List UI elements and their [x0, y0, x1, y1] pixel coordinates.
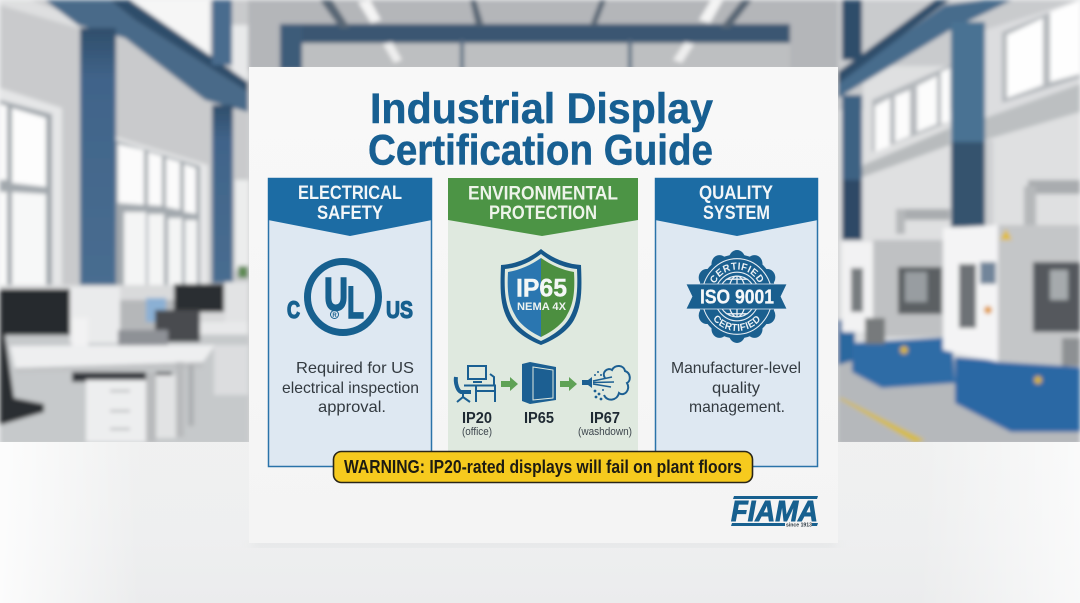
icon: office desk	[456, 366, 496, 402]
header: quality system: QUALITY	[699, 182, 773, 204]
text: quality description: Manufacturer-level	[671, 360, 801, 377]
icon: IP65 display	[522, 362, 556, 404]
callout: warning: WARNING: IP20-rated displays will fail on plant floors	[344, 457, 742, 477]
header: quality system: SYSTEM	[703, 202, 770, 224]
icon: cULus mark: U	[324, 268, 348, 320]
header: electrical safety	[268, 178, 432, 236]
icon: IP65 NEMA 4X shield: NEMA 4X	[517, 301, 567, 313]
right factory floor and machines	[838, 225, 1080, 445]
labels: IP ratings: (office)	[462, 426, 492, 438]
panel: quality system	[654, 178, 818, 468]
labels: IP ratings	[462, 410, 632, 438]
header: electrical safety: SAFETY	[317, 202, 383, 224]
icon: cULus mark: L	[347, 277, 364, 328]
arrow: office to IP65	[501, 377, 518, 391]
right factory wall	[838, 0, 1080, 445]
text: electrical description: Required for US	[296, 360, 414, 377]
ceiling	[240, 0, 850, 70]
header: environmental protection: PROTECTION	[489, 202, 597, 224]
text: quality description	[671, 360, 801, 416]
text: quality description: quality	[712, 380, 760, 397]
text: electrical description: approval.	[318, 399, 386, 416]
icon: ISO 9001 seal	[686, 250, 786, 343]
arrow: IP65 to washdown	[560, 377, 577, 391]
header: environmental protection	[448, 178, 638, 236]
icon: washdown spray	[582, 366, 630, 400]
labels: IP ratings: IP65	[524, 410, 554, 427]
labels: IP ratings: IP67	[590, 410, 620, 427]
labels: IP ratings: (washdown)	[578, 426, 632, 438]
panel: environmental protection	[448, 178, 638, 467]
icon: ISO 9001 seal: ISO 9001	[700, 286, 774, 308]
left office wall	[0, 0, 249, 300]
panel: electrical safety	[268, 178, 432, 466]
icon: cULus mark	[287, 262, 413, 332]
title: Certification Guide	[368, 126, 713, 174]
header: quality system	[655, 178, 818, 236]
title: Industrial Display	[370, 85, 713, 133]
blurred factory background	[0, 0, 1080, 445]
callout: warning	[334, 452, 752, 482]
icon: cULus mark: C	[287, 297, 300, 324]
text: quality description: management.	[689, 399, 785, 416]
left office floor and desks	[0, 282, 248, 445]
icon: cULus mark: R	[332, 313, 337, 319]
certification guide card	[249, 67, 838, 543]
header: electrical safety: ELECTRICAL	[298, 182, 402, 204]
icon: IP65 NEMA 4X shield: IP65	[516, 274, 567, 302]
title	[368, 85, 713, 174]
text: electrical description	[282, 360, 419, 416]
logo: FIAMA: since 1913	[786, 522, 812, 528]
icon: ISO 9001 seal: CERTIFIED	[714, 316, 760, 332]
icon: ISO 9001 seal: CERTIFIED	[710, 262, 764, 282]
logo: FIAMA: FIAMA	[731, 496, 818, 528]
header: environmental protection: ENVIRONMENTAL	[468, 182, 618, 204]
card shadow	[252, 541, 836, 547]
icon: cULus mark: US	[386, 297, 413, 324]
white table surface	[0, 442, 1080, 603]
text: electrical description: electrical inspection	[282, 380, 419, 397]
labels: IP ratings: IP20	[462, 410, 492, 427]
icon: IP65 NEMA 4X shield	[501, 249, 581, 345]
